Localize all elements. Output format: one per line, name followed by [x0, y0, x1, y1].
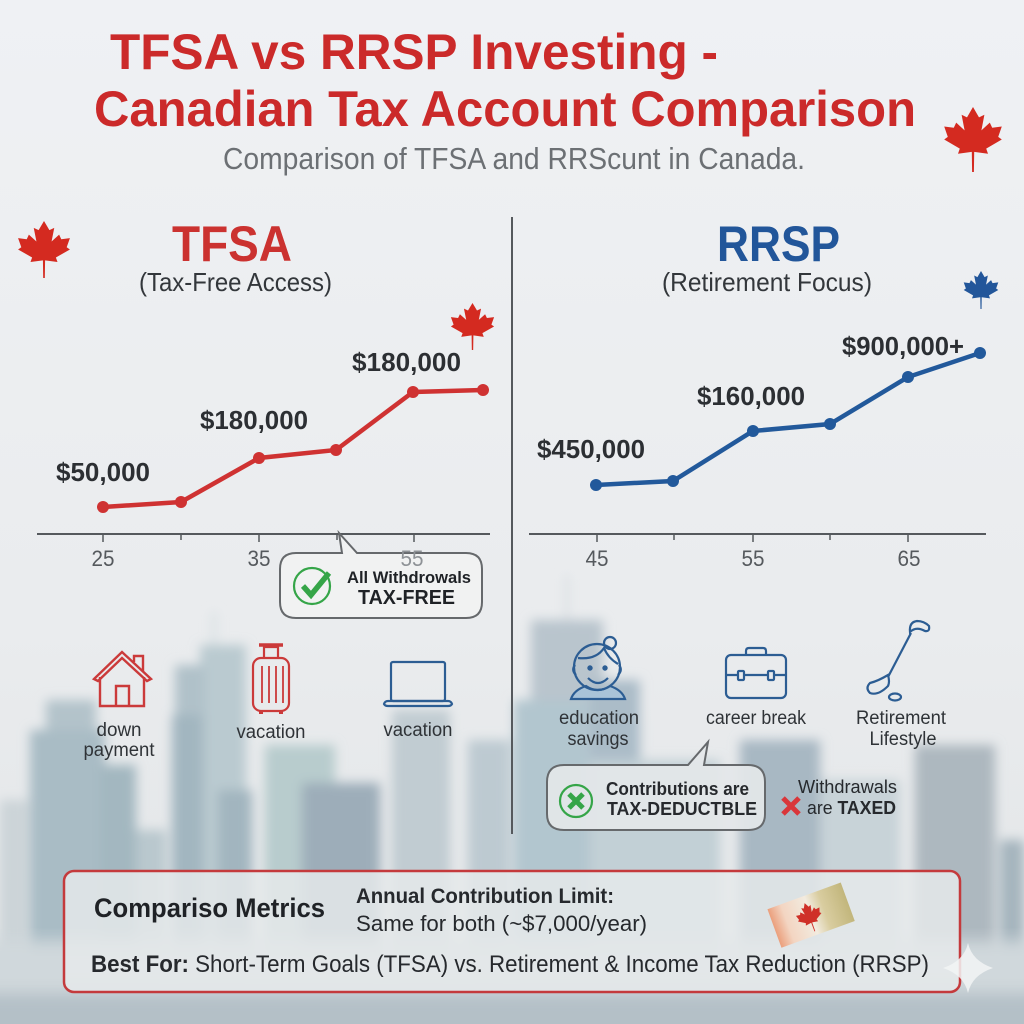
- label: education savings: education: [559, 708, 639, 729]
- label: retirement lifestyle: Lifestyle: [870, 729, 936, 750]
- heading: RRSP: RRSP: [717, 216, 840, 272]
- callout: all withdrawals tax-free: 55: [400, 546, 424, 571]
- subheading: TFSA: (Tax-Free Access): [139, 267, 332, 297]
- line chart: RRSP: [529, 331, 986, 571]
- line chart: TFSA: $180,000: [352, 347, 461, 377]
- label: career break: career break: [706, 708, 806, 729]
- label: education savings: savings: [568, 729, 628, 750]
- text: annual contribution limit: Same for both (~$7,000/year): [356, 911, 647, 936]
- icon: laptop: [384, 662, 452, 706]
- callout: withdrawals are taxed: Withdrawals: [798, 777, 897, 797]
- title: Canadian Tax Account Comparison: [94, 81, 916, 137]
- icon: golf club: [868, 621, 929, 700]
- line chart: TFSA: 35: [248, 546, 270, 571]
- icon: briefcase: [726, 648, 786, 698]
- text: annual contribution limit: [356, 885, 647, 936]
- label: retirement lifestyle: [856, 708, 947, 750]
- blurred city skyline: [0, 575, 1024, 970]
- text: best for: Best For: Short-Term Goals (TFSA) vs. Retirement & Income Tax Reduction (RRSP): [91, 951, 929, 978]
- line chart: TFSA: [37, 347, 490, 571]
- callout: contributions tax-deductible: Contributions are: [606, 779, 749, 799]
- callout: contributions tax-deductible: [547, 742, 765, 830]
- heading: metrics: Compariso Metrics: [94, 893, 325, 923]
- callout: withdrawals are taxed: [783, 777, 897, 818]
- line chart: RRSP: $450,000: [537, 434, 645, 464]
- icon: maple leaf top right: [944, 107, 1002, 172]
- title: [94, 24, 916, 137]
- label: retirement lifestyle: Retirement: [856, 708, 947, 729]
- label: vacation: vacation: [236, 722, 306, 743]
- line chart: RRSP: 55: [742, 546, 764, 571]
- icon: banknote: [767, 883, 855, 948]
- line chart: RRSP: $160,000: [697, 381, 805, 411]
- line chart: RRSP: $900,000+: [842, 331, 964, 361]
- line chart: RRSP: 65: [898, 546, 920, 571]
- icon: blue maple leaf: [964, 271, 998, 309]
- icon: maple leaf left: [18, 221, 70, 278]
- line chart: RRSP: 45: [586, 546, 608, 571]
- line chart: TFSA: 25: [92, 546, 114, 571]
- label: down payment: payment: [84, 740, 155, 761]
- line chart: TFSA: $50,000: [56, 457, 150, 487]
- panel: comparison metrics: [64, 871, 960, 992]
- title: TFSA vs RRSP Investing -: [110, 24, 718, 80]
- icon: house: [94, 652, 151, 706]
- icon: maple leaf near chart: [451, 303, 494, 350]
- subtitle: Comparison of TFSA and RRScunt in Canada.: [223, 141, 805, 176]
- icon: sparkle: [943, 943, 993, 993]
- callout: all withdrawals tax-free: [280, 533, 482, 618]
- callout: withdrawals are taxed: are TAXED: [807, 798, 896, 818]
- center divider: [511, 217, 513, 834]
- heading: TFSA: TFSA: [172, 216, 292, 272]
- label: education savings: [559, 708, 639, 750]
- hazy waterfront: [0, 940, 1024, 1024]
- callout: all withdrawals tax-free: TAX-FREE: [358, 587, 455, 609]
- text: annual contribution limit: Annual Contribution Limit:: [356, 885, 614, 908]
- label: vacation: vacation: [384, 720, 452, 741]
- icon: smiling person: [571, 637, 625, 699]
- subheading: RRSP: (Retirement Focus): [662, 267, 872, 297]
- label: down payment: [84, 720, 155, 761]
- label: down payment: down: [96, 720, 142, 741]
- panel: RRSP: [529, 216, 998, 830]
- panel: TFSA: [18, 216, 494, 761]
- line chart: TFSA: $180,000: [200, 405, 308, 435]
- callout: all withdrawals tax-free: All Withdrowals: [347, 568, 471, 587]
- callout: contributions tax-deductible: TAX-DEDUCTBLE: [607, 799, 757, 819]
- icon: suitcase: [253, 645, 289, 714]
